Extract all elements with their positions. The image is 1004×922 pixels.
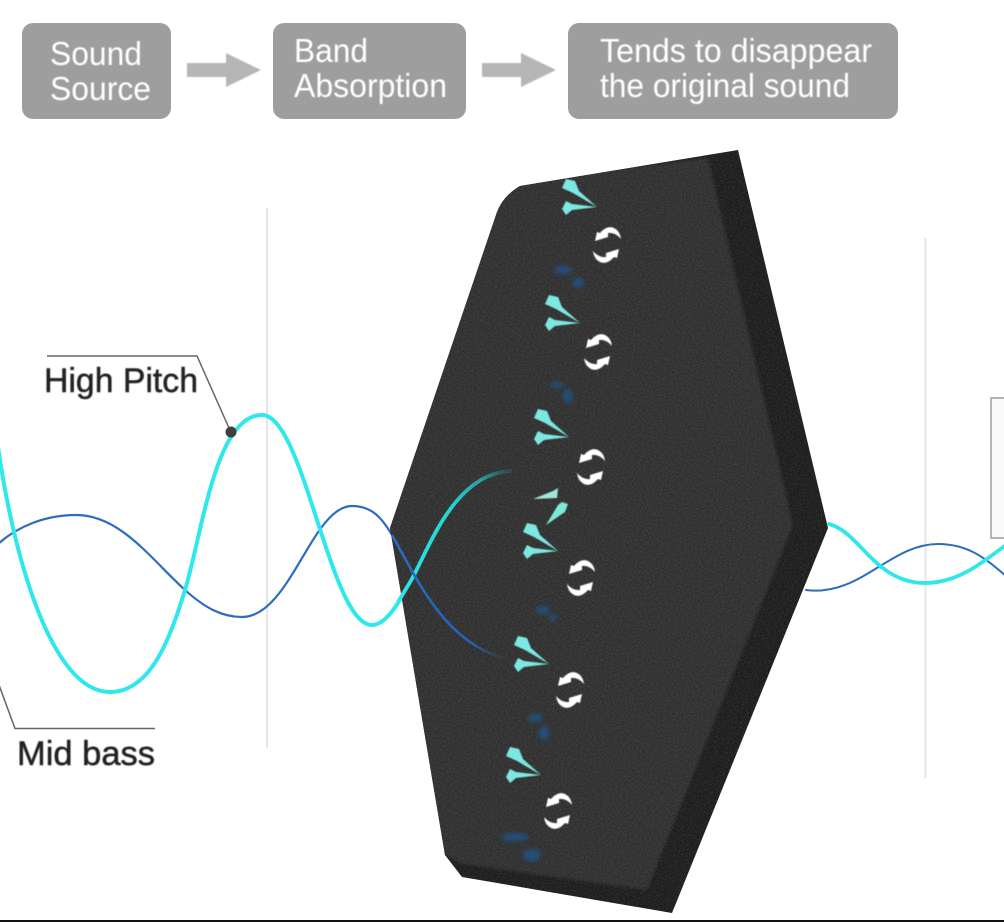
- wave inside panel: high pitch: [398, 471, 512, 602]
- step box: Tends to disappear the original sound: [568, 23, 898, 119]
- label: Mid bass: Mid bass: [17, 735, 155, 773]
- panel texture: [385, 150, 835, 920]
- step box: Band Absorption: [273, 23, 466, 119]
- label: High Pitch: [44, 356, 236, 438]
- outgoing waves: [806, 524, 1004, 591]
- faded box at right edge: [991, 398, 1004, 538]
- high pitch wave outgoing: [829, 524, 1004, 583]
- vertical marker line left: [266, 208, 268, 748]
- step box: Sound Source: Sound: [50, 35, 142, 72]
- white rotating arrows: [544, 227, 621, 829]
- acoustic panel: [385, 150, 835, 920]
- cyan arrow pairs: [506, 179, 597, 783]
- mid bass wave outgoing: [806, 544, 1004, 591]
- flow header: sound source to band absorption to disappearing sound: [22, 23, 898, 119]
- mid bass wave incoming: [0, 506, 392, 617]
- step box: Tends to disappear the original sound: Tends to disappear: [600, 32, 872, 69]
- step box: Band Absorption: Band: [294, 32, 368, 69]
- label: High Pitch: High Pitch: [44, 362, 198, 400]
- wave inside panel: mid bass: [392, 535, 506, 658]
- step box: Tends to disappear the original sound: the original sound: [600, 67, 850, 104]
- arrow: source to absorption: [187, 53, 261, 87]
- step box: Band Absorption: Absorption: [294, 67, 447, 104]
- panel front face: [385, 158, 793, 890]
- faded blue dashes: [501, 266, 584, 861]
- step box: Sound Source: Source: [50, 70, 151, 107]
- panel side faces: [390, 150, 828, 913]
- small reflected arrows: [533, 488, 558, 499]
- high pitch wave incoming: [0, 415, 415, 692]
- bottom edge line: [0, 920, 1004, 922]
- arrow: absorption to result: [482, 53, 556, 87]
- incoming waves: [0, 415, 415, 692]
- vertical marker line right: [924, 238, 926, 778]
- step box: Sound Source: [22, 23, 171, 119]
- label: Mid bass: [0, 685, 155, 773]
